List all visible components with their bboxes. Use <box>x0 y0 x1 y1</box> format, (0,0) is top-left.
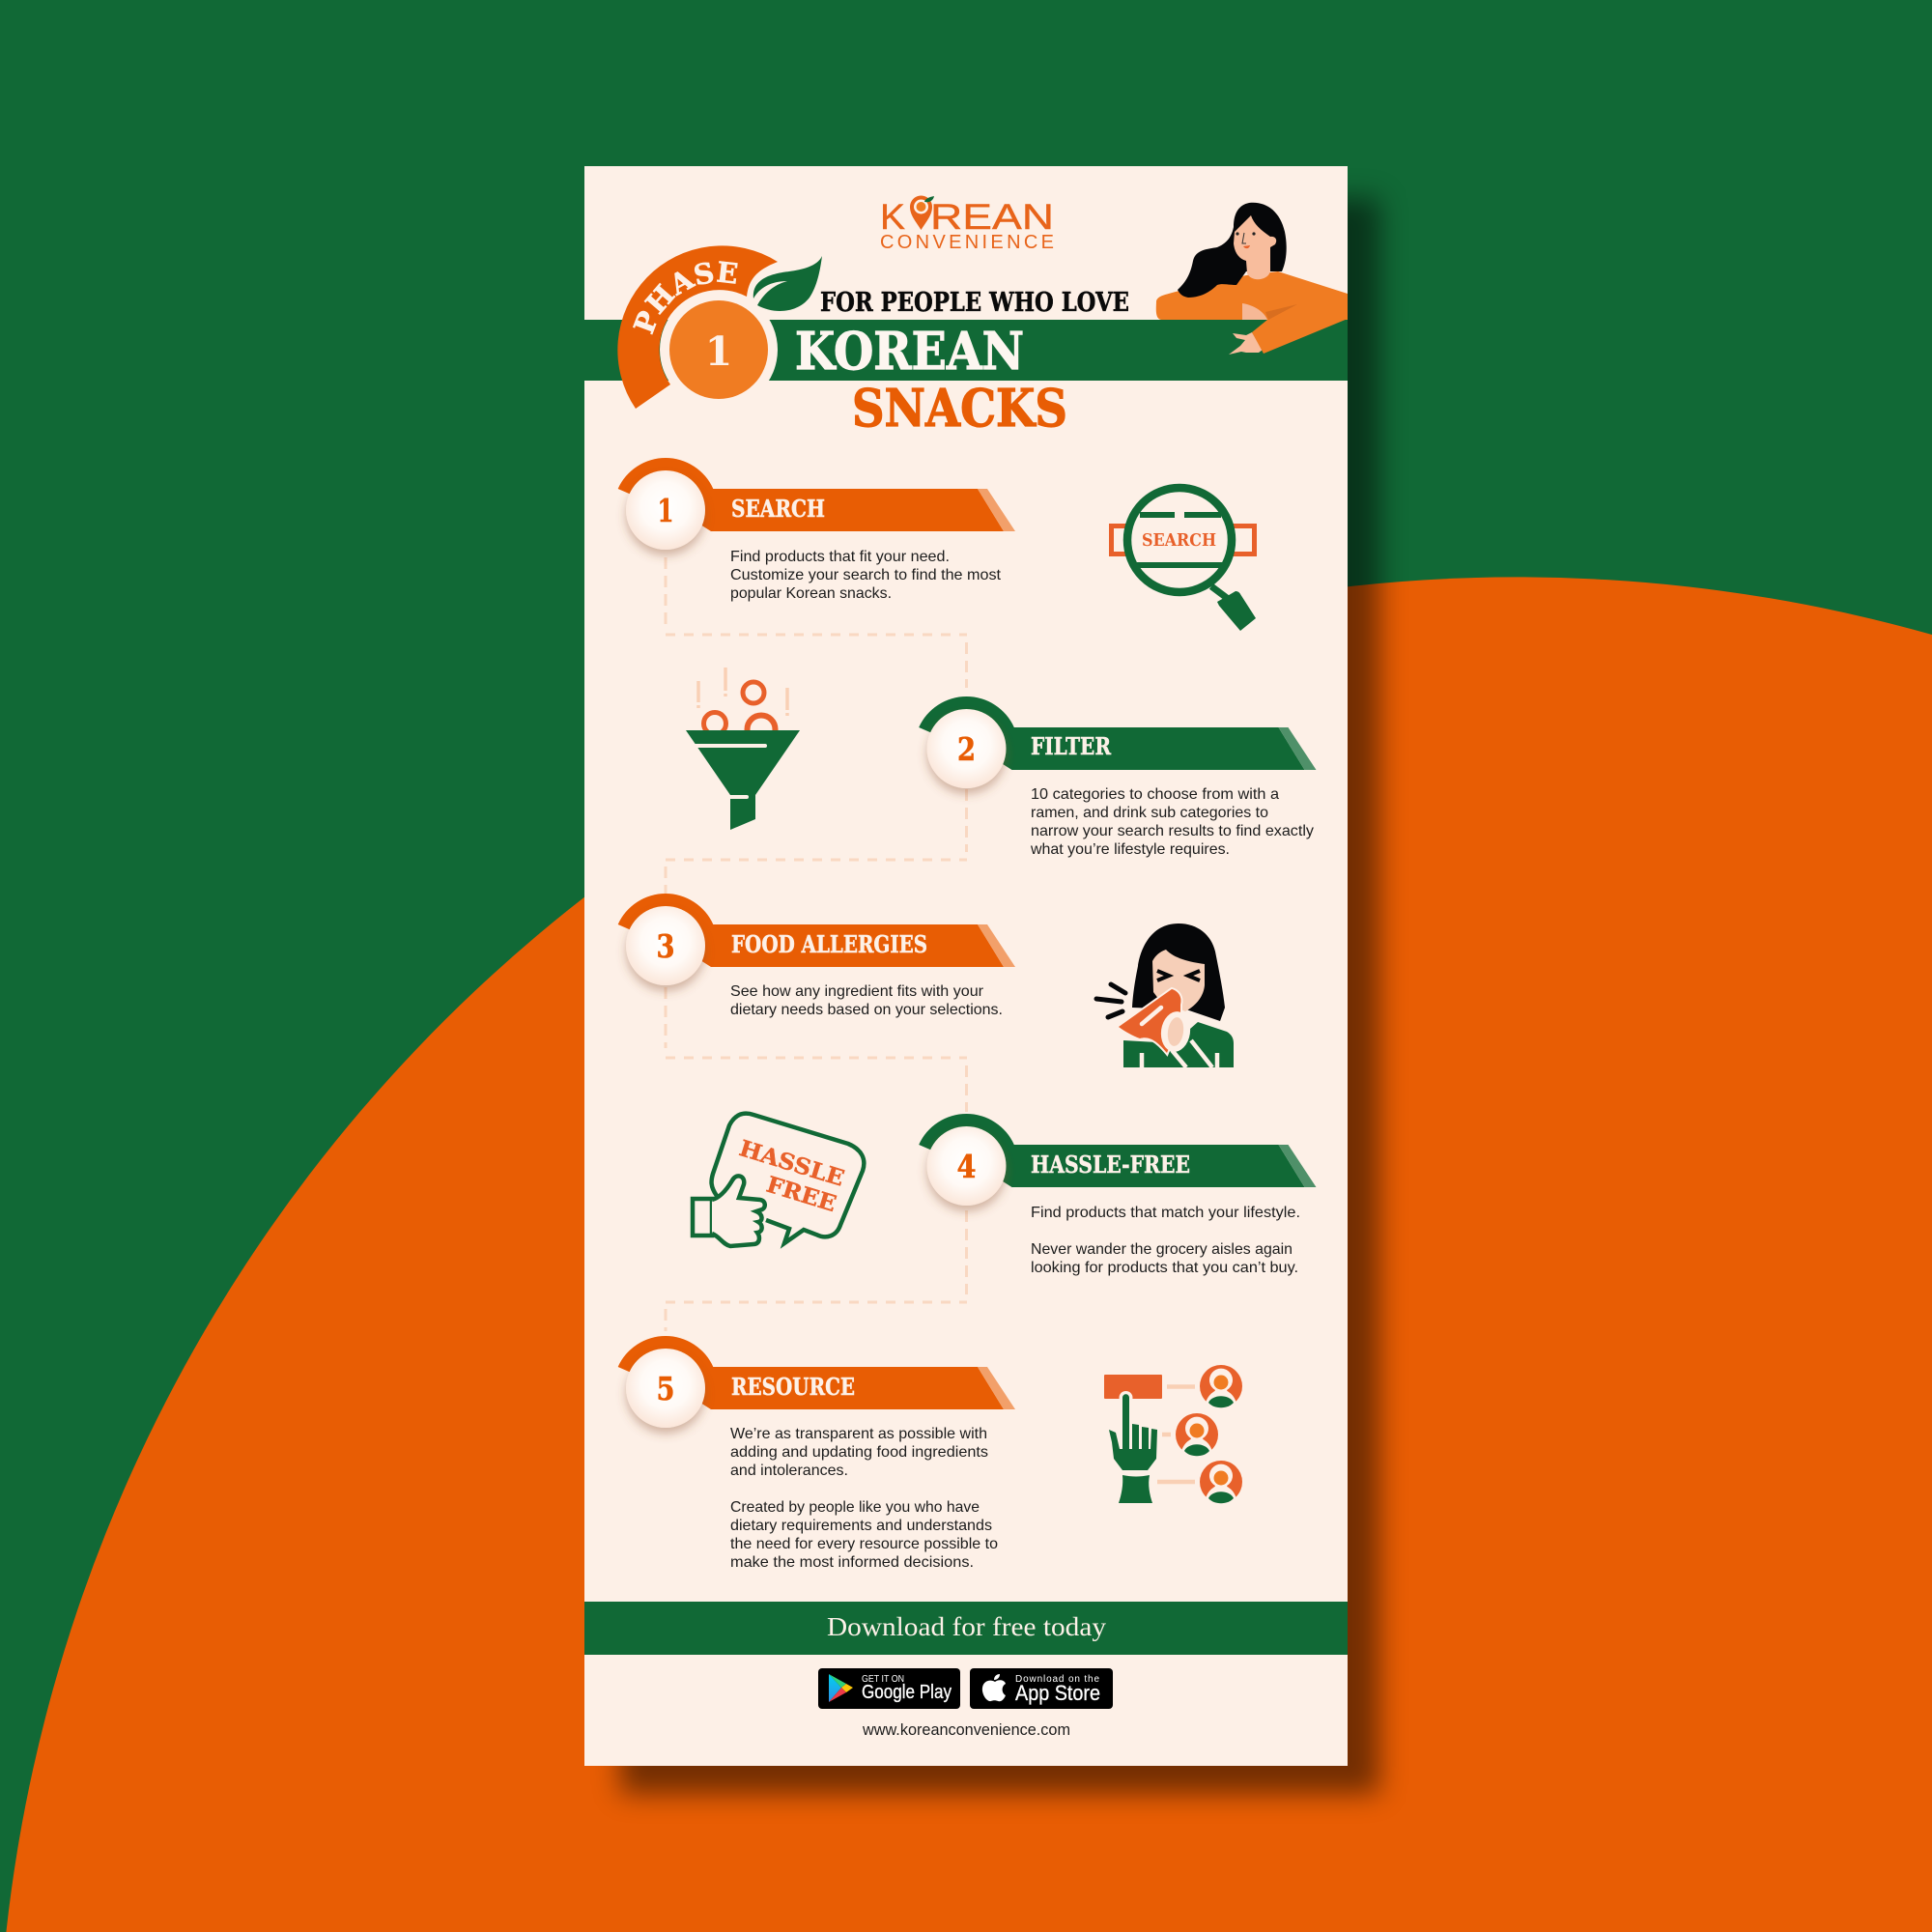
footer band: download call to action <box>584 1602 1348 1655</box>
icon: woman sneezing <box>1096 923 1234 1067</box>
step 5: resource: We’re as transparent as possible with <box>730 1426 987 1442</box>
step 5: resource: dietary requirements and understands <box>730 1518 992 1534</box>
step 4: hassle-free: Never wander the grocery aisles again <box>1031 1241 1293 1258</box>
step 2: filter: FILTER <box>1031 732 1112 760</box>
icon: hassle free thumbs up speech bubble: HASSLE <box>736 1135 847 1192</box>
step 1: search <box>618 458 1015 602</box>
panel drop shadow <box>620 198 1379 1794</box>
icon: filter funnel <box>686 668 800 830</box>
website url: www.koreanconvenience.com <box>862 1720 1070 1739</box>
step 5: resource: Created by people like you who have <box>730 1499 980 1516</box>
step 2: filter: 2 <box>957 730 976 768</box>
step 4: hassle-free: 4 <box>956 1148 976 1185</box>
icon: magnifier search <box>1111 488 1256 631</box>
illustration: woman leaning on band <box>1156 203 1348 355</box>
step 2: filter: narrow your search results to find exactly <box>1031 823 1314 839</box>
button: App Store: Download on the <box>1015 1674 1099 1685</box>
step 3: food allergies: See how any ingredient fits with your <box>730 983 984 1000</box>
title: for people who love: FOR PEOPLE WHO LOVE <box>820 288 1129 318</box>
logo: Korean Convenience <box>880 195 1054 253</box>
step 4: hassle-free <box>919 1114 1316 1276</box>
step 5: resource: the need for every resource possible to <box>730 1536 998 1552</box>
footer band: download call to action: Download for free today <box>827 1612 1107 1641</box>
step 1: search: SEARCH <box>731 495 825 523</box>
button: App Store <box>970 1668 1113 1709</box>
step 5: resource: adding and updating food ingredients <box>730 1444 988 1461</box>
step 1: search: Find products that fit your need. <box>730 549 950 565</box>
dashed connectors between steps <box>666 557 967 1331</box>
badge: Phase 1 fruit <box>617 245 822 409</box>
title: Snacks: SNACKS <box>852 379 1067 439</box>
header band <box>584 320 1348 381</box>
background: orange circle <box>6 577 1932 1932</box>
button: Google Play: GET IT ON <box>862 1674 904 1685</box>
logo: Korean Convenience: K <box>880 197 905 237</box>
title: Korean: KOREAN <box>795 322 1024 382</box>
step 5: resource: make the most informed decisions. <box>730 1554 974 1571</box>
step 5: resource <box>618 1336 1015 1571</box>
step 2: filter: ramen, and drink sub categories to <box>1031 805 1268 821</box>
step 3: food allergies: FOOD ALLERGIES <box>731 930 927 958</box>
step 4: hassle-free: HASSLE-FREE <box>1031 1151 1190 1179</box>
step 2: filter: 10 categories to choose from with a <box>1031 786 1279 803</box>
button: Google Play <box>818 1668 960 1709</box>
step 1: search: popular Korean snacks. <box>730 585 892 602</box>
step 3: food allergies <box>618 894 1015 1018</box>
button: App Store: App Store <box>1015 1681 1100 1705</box>
badge: Phase 1 fruit: 1 <box>705 328 732 375</box>
icon: hassle free thumbs up speech bubble <box>693 1114 864 1246</box>
step 4: hassle-free: Find products that match your lifestyle. <box>1031 1205 1300 1221</box>
step 3: food allergies: dietary needs based on your selections. <box>730 1002 1003 1018</box>
step 1: search: Customize your search to find the most <box>730 567 1002 583</box>
icon: hassle free thumbs up speech bubble: FREE <box>763 1172 839 1217</box>
step 2: filter <box>919 696 1316 858</box>
step 5: resource: 5 <box>657 1370 674 1407</box>
logo: Korean Convenience: CONVENIENCE <box>880 232 1054 253</box>
button: Google Play: Google Play <box>862 1682 952 1703</box>
icon: hand pressing button linked to people <box>1104 1365 1242 1504</box>
step 5: resource: RESOURCE <box>731 1373 855 1401</box>
step 1: search: 1 <box>657 492 674 529</box>
step 3: food allergies: 3 <box>657 927 674 965</box>
panel: infographic card <box>584 166 1348 1766</box>
badge: Phase 1 fruit: PHASE <box>633 261 738 334</box>
logo: Korean Convenience: REAN <box>930 197 1054 237</box>
step 4: hassle-free: looking for products that you can’t buy. <box>1031 1260 1298 1276</box>
step 5: resource: and intolerances. <box>730 1463 848 1479</box>
step 2: filter: what you’re lifestyle requires. <box>1030 841 1230 858</box>
icon: magnifier search: SEARCH <box>1142 530 1216 551</box>
